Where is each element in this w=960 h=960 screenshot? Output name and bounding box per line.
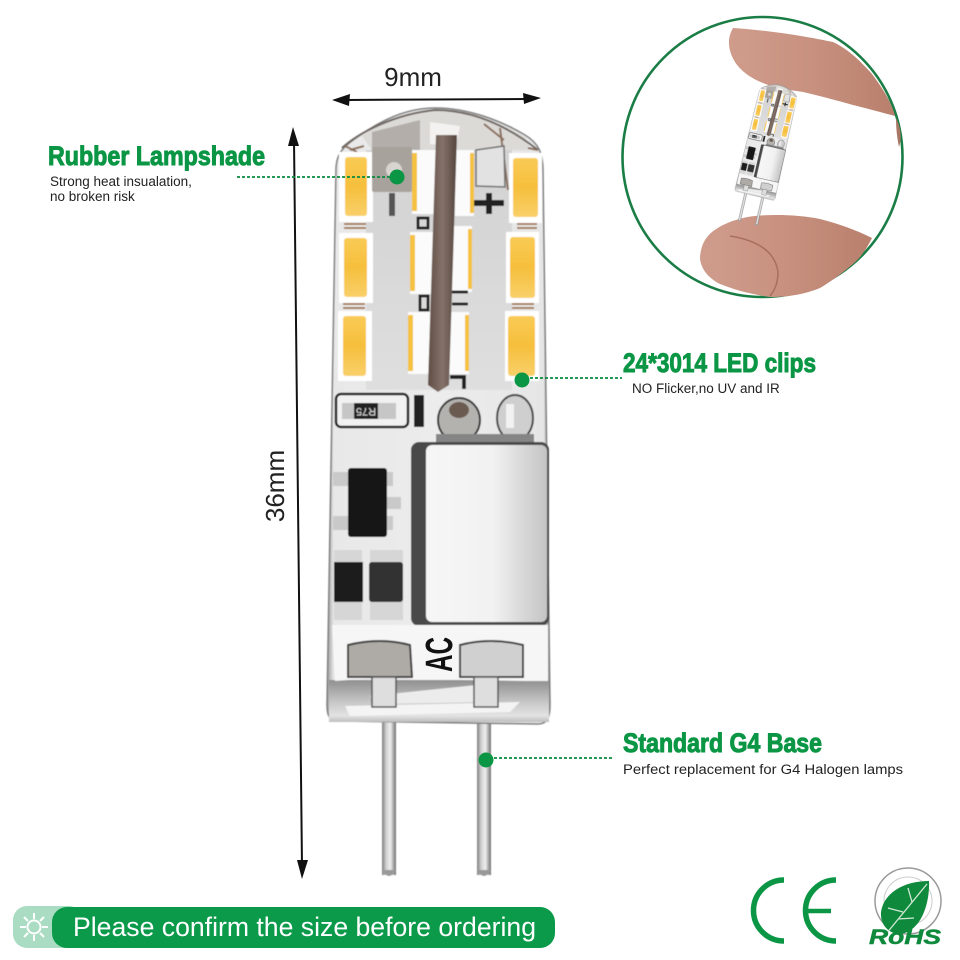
RoHS logo [869, 868, 941, 949]
height label: 36mm [260, 450, 290, 522]
lower finger [700, 215, 872, 297]
capacitor [411, 442, 549, 626]
leader line [530, 377, 622, 379]
description: Strong heat insualation, [50, 174, 192, 189]
description: Perfect replacement for G4 Halogen lamps [623, 762, 903, 777]
LEDs left column [338, 152, 373, 381]
LEDs right column [505, 153, 542, 381]
diodes [334, 550, 403, 620]
black bar [414, 395, 424, 427]
centre LEDs [408, 150, 474, 374]
notice text: Please confirm the size before ordering [73, 912, 536, 942]
RoHS wordmark: RoHS [869, 926, 941, 949]
IC chip [333, 468, 401, 537]
width label: 9mm [384, 62, 442, 92]
CE mark [753, 880, 836, 941]
icon: sun [20, 913, 48, 941]
marker [514, 372, 530, 388]
fingernail crease [730, 236, 778, 296]
heading: Standard G4 Base [623, 728, 822, 758]
silicone shell [327, 108, 550, 724]
top dome detail [342, 110, 538, 190]
seal ring [875, 868, 941, 934]
brown centre stripe [428, 135, 457, 392]
heading: Rubber Lampshade [48, 141, 265, 171]
width dimension arrow [332, 93, 541, 106]
leader line [237, 176, 392, 178]
description: NO Flicker,no UV and IR [632, 381, 780, 396]
AC marking: AC [419, 637, 461, 672]
base plate [329, 625, 549, 722]
size comparison circle [622, 17, 902, 297]
metal tab and contacts [372, 146, 505, 389]
R75 resistor [336, 394, 408, 427]
solder domes [436, 395, 534, 444]
height dimension arrow [288, 127, 308, 879]
callout: rubber lampshade [48, 141, 404, 204]
finger sliver [896, 118, 901, 147]
callout: LED clips [514, 348, 816, 396]
circle outline [622, 17, 902, 297]
size notice pill [13, 906, 555, 948]
leaf [881, 881, 929, 934]
pill dark bar [52, 907, 555, 948]
miniature bulb [728, 80, 800, 228]
LED section backing [366, 150, 512, 390]
description: no broken risk [50, 189, 135, 204]
marker [390, 170, 404, 184]
pill light tab [13, 906, 83, 948]
pins [382, 715, 491, 876]
G4 bulb [327, 108, 550, 876]
leader line [494, 757, 614, 759]
marker [478, 752, 494, 768]
callout: G4 base [478, 728, 903, 777]
heading: 24*3014 LED clips [623, 348, 816, 378]
upper finger [729, 28, 895, 116]
R75 resistor: R75 [356, 405, 376, 417]
